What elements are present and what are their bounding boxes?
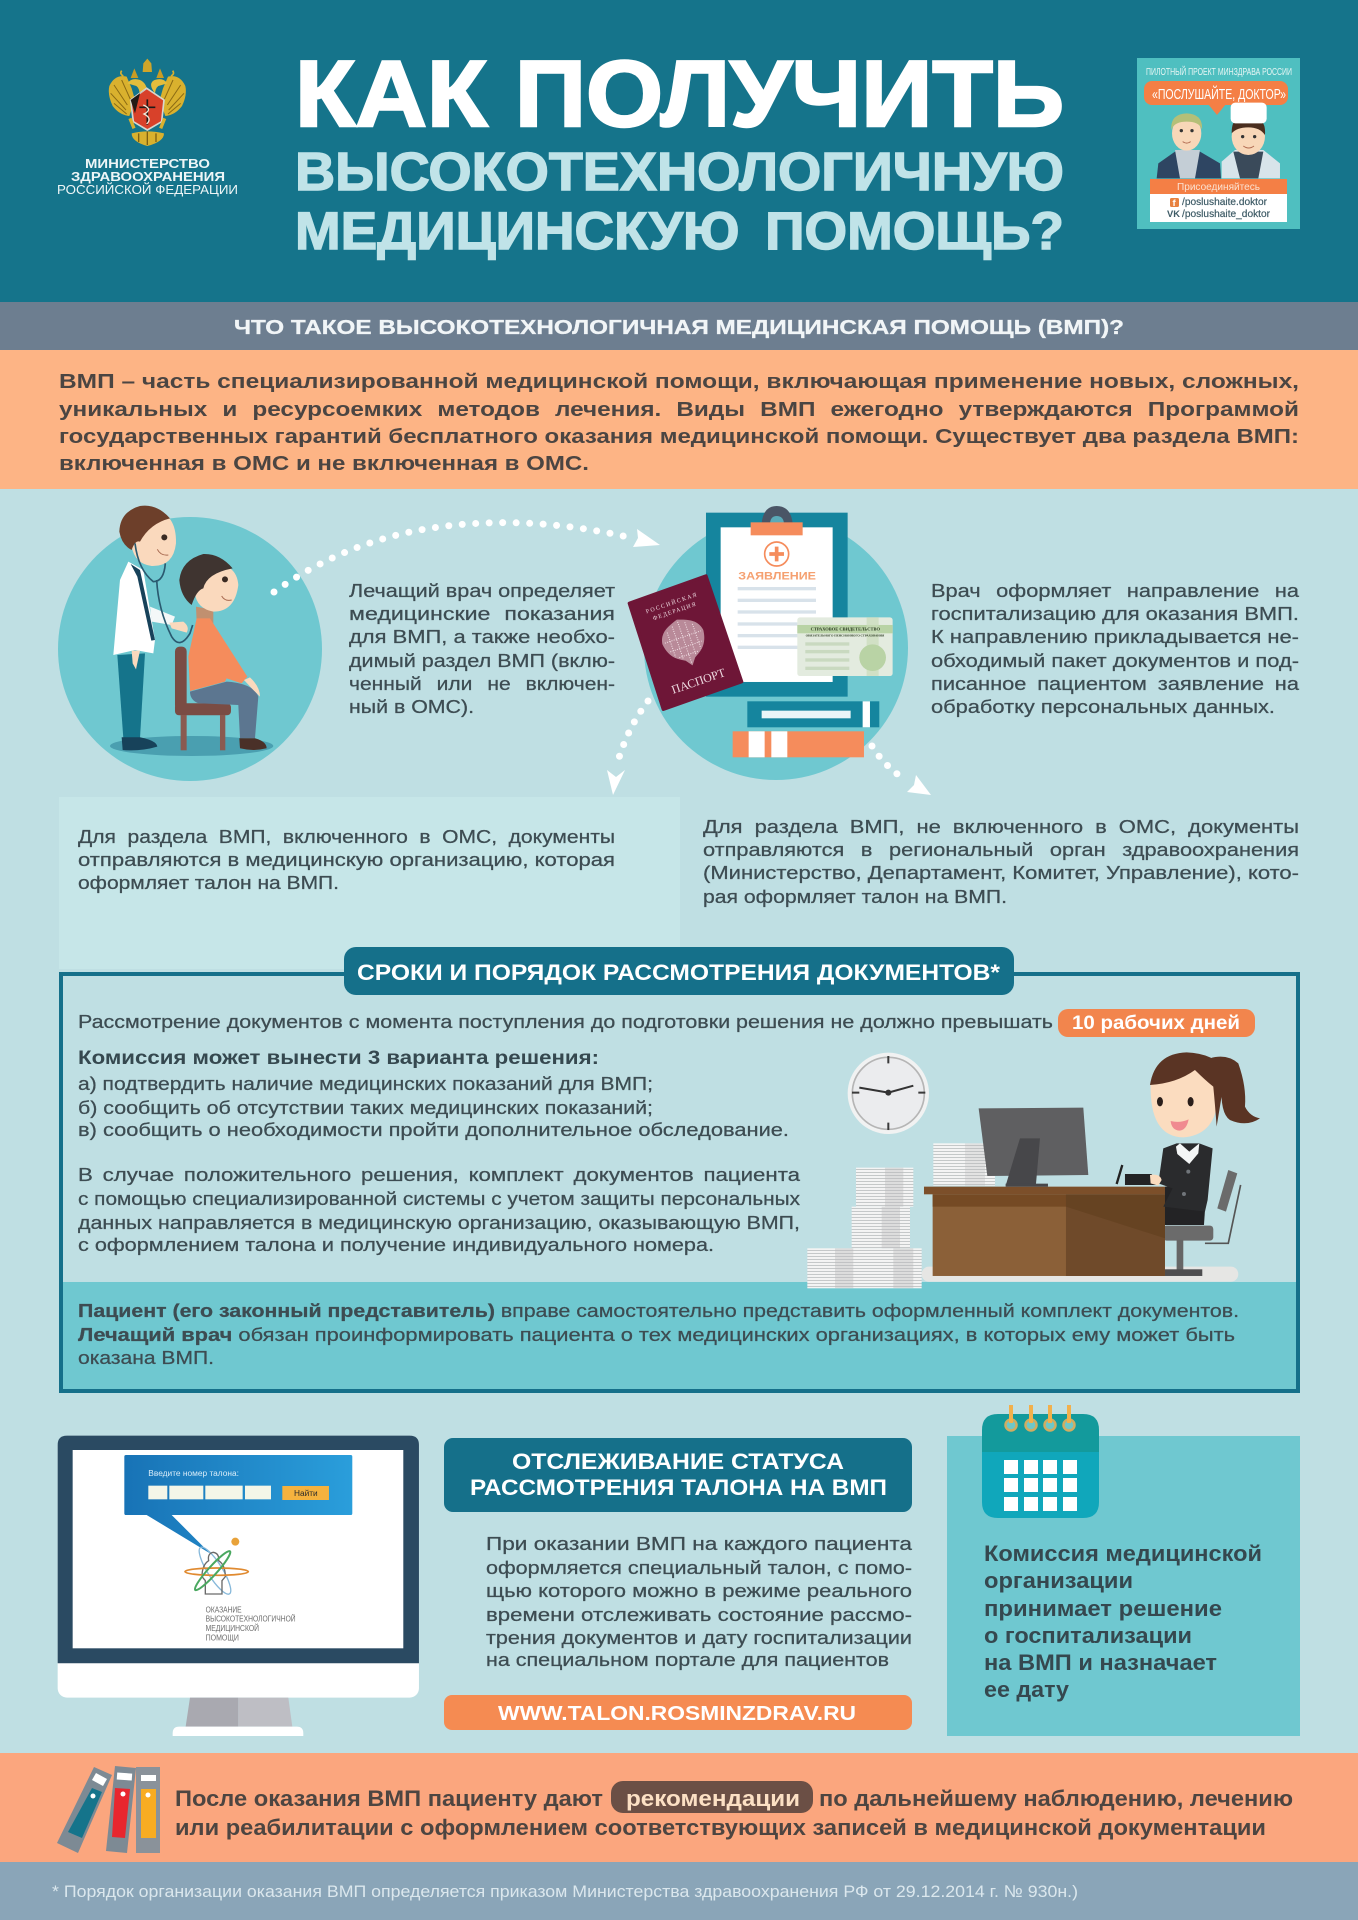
text: talon description: оформляется специальный талон, с помо- (486, 1557, 912, 1578)
band: recommendations (0, 1753, 1358, 1862)
text: ten working days limit (78, 1009, 1255, 1037)
poster: Послушайте, доктор: Присоединяйтесь (1177, 181, 1260, 193)
illustration: computer with talon portal: ВЫСОКОТЕХНОЛОГИЧНОЙ (206, 1615, 296, 1624)
text: attending doctor: димый раздел ВМП (вклю- (349, 650, 615, 671)
ministry name: ЗДРАВООХРАНЕНИЯ (71, 170, 225, 184)
poster: Послушайте, доктор (1137, 58, 1300, 229)
heading: review terms: СРОКИ И ПОРЯДОК РАССМОТРЕНИЯ ДОКУМЕНТОВ* (357, 960, 1000, 985)
heading: status tracking (444, 1438, 912, 1512)
text: commission decision (984, 1541, 1262, 1702)
text: talon description: на специальном портале для пациентов (486, 1649, 889, 1670)
ministry name: МИНИСТЕРСТВО (85, 157, 210, 171)
text: non-OMS branch (703, 816, 1299, 907)
panel: VMP definition: государственных гарантий бесплатного оказания медицинской помощи. Существует два раздела ВМП: (59, 425, 1299, 448)
text: talon description: трения документов и дату госпитализации (486, 1627, 912, 1648)
illustration: documents: ЗАЯВЛЕНИЕ (738, 570, 816, 582)
illustration: computer with talon portal: ОКАЗАНИЕ (206, 1605, 242, 1614)
illustration: computer with talon portal: МЕДИЦИНСКОЙ (206, 1624, 259, 1633)
poster: Послушайте, доктор: /poslushaite_doktor (1182, 208, 1270, 220)
text: attending doctor: ный в ОМС). (349, 696, 474, 717)
text: talon description (486, 1533, 913, 1670)
panel: review terms and procedure (61, 947, 1298, 1391)
text: recommendations (175, 1781, 1293, 1840)
illustration: documents: ОБЯЗАТЕЛЬНОГО ПЕНСИОННОГО СТРАХОВАНИЯ (806, 633, 885, 637)
title (295, 41, 1064, 261)
text: referral paperwork: писанное пациентом заявление на (931, 673, 1300, 694)
icon: ministry emblem (109, 59, 186, 146)
panel: VMP definition: включенная в ОМС и не включенная в ОМС. (59, 452, 589, 475)
text: commission decisions (78, 1048, 789, 1140)
text: referral paperwork: обходимый пакет документов и под- (931, 650, 1299, 671)
header band (0, 0, 1358, 302)
text: recommendations: рекомендации (626, 1786, 800, 1811)
panel: commission decides (947, 1405, 1300, 1736)
text: commission decision: ее дату (984, 1677, 1070, 1702)
poster: Послушайте, доктор: «ПОСЛУШАЙТЕ, ДОКТОР» (1152, 85, 1286, 103)
icon: portal logo (185, 1538, 248, 1598)
title: ВЫСОКОТЕХНОЛОГИЧНУЮ (295, 142, 1064, 202)
text: recommendations: или реабилитации с оформлением соответствующих записей в медицинской документации (175, 1815, 1266, 1840)
panel: VMP definition (0, 350, 1358, 489)
illustration: documents: ФЕДЕРАЦИЯ (652, 602, 697, 622)
illustration: clerk at desk (807, 1052, 1260, 1288)
text: commission decision: Комиссия медицинской (984, 1541, 1262, 1566)
ministry name (57, 157, 238, 197)
title: МЕДИЦИНСКУЮ ПОМОЩЬ? (295, 202, 1064, 261)
band: what is VMP: ЧТО ТАКОЕ ВЫСОКОТЕХНОЛОГИЧНАЯ МЕДИЦИНСКАЯ ПОМОЩЬ (ВМП)? (234, 317, 1124, 339)
text: referral paperwork: Врач оформляет направление на (931, 580, 1300, 601)
text: talon description: щью которого можно в режиме реального (486, 1580, 912, 1601)
text: recommendations: После оказания ВМП пациенту дают (175, 1786, 603, 1811)
text: talon description: При оказании ВМП на каждого пациента (486, 1533, 913, 1554)
text: non-OMS branch: Для раздела ВМП, не включенного в ОМС, документы (703, 816, 1299, 837)
text: positive decision: В случае положительного решения, комплект документов пациента (78, 1164, 801, 1185)
icon: calendar (982, 1405, 1099, 1518)
text: commission decision: организации (984, 1568, 1133, 1593)
button: portal url (444, 1695, 912, 1730)
panel: OMS branch: отправляются в медицинскую организацию, которая (78, 849, 615, 870)
text: positive decision: данных направляется в медицинскую организацию, оказывающую ВМП, (78, 1212, 800, 1233)
heading: status tracking: РАССМОТРЕНИЯ ТАЛОНА НА ВМП (470, 1475, 887, 1500)
text: attending doctor: для ВМП, а также необхо- (349, 626, 615, 647)
illustration: computer with talon portal: Найти (294, 1489, 318, 1498)
text: patient and doctor rights: Лечащий врач обязан проинформировать пациента о тех медицинских организациях, в которых ему может быть (78, 1324, 1235, 1345)
poster: Послушайте, доктор: ПИЛОТНЫЙ ПРОЕКТ МИНЗДРАВА РОССИИ (1146, 65, 1292, 78)
text: talon description: времени отслеживать состояние рассмо- (486, 1604, 912, 1625)
illustration: doctor examines patient (58, 506, 322, 781)
text: referral paperwork: госпитализацию для оказания ВМП. (931, 603, 1299, 624)
panel: VMP definition: ВМП – часть специализированной медицинской помощи, включающая применение новых, сложных, (59, 370, 1299, 393)
text: patient and doctor rights (78, 1300, 1239, 1368)
arrow: dotted from doctor to documents (274, 523, 660, 592)
panel: OMS branch (59, 797, 680, 969)
text: referral paperwork: К направлению прикладывается не- (931, 626, 1299, 647)
text: referral paperwork (931, 580, 1300, 717)
icon: binders (57, 1766, 160, 1853)
footer: footnote: * Порядок организации оказания ВМП определяется приказом Министерства здравоохранения РФ от 29.12.2014 г. № 930н.) (52, 1882, 1078, 1901)
text: commission decision: на ВМП и назначает (984, 1650, 1217, 1675)
text: commission decisions: Комиссия может вынести 3 варианта решения: (78, 1048, 599, 1069)
text: patient and doctor rights: Пациент (его законный представитель) вправе самостоятельно представить оформленный комплект документов. (78, 1300, 1239, 1321)
text: attending doctor: ченный или не включен- (349, 673, 615, 694)
text: positive decision: с помощью специализированной системы с учетом защиты персональных (78, 1188, 801, 1209)
text: positive decision (78, 1164, 801, 1255)
text: attending doctor: медицинские показания (349, 603, 615, 624)
text: positive decision: с оформлением талона и получение индивидуального номера. (78, 1234, 714, 1255)
text: commission decisions: в) сообщить о необходимости пройти дополнительное обследование. (78, 1119, 789, 1140)
illustration: documents (629, 506, 908, 780)
ministry name: РОССИЙСКОЙ ФЕДЕРАЦИИ (57, 182, 238, 197)
text: ten working days limit: 10 рабочих дней (1072, 1013, 1240, 1034)
text: commission decision: о госпитализации (984, 1623, 1192, 1648)
text: commission decisions: а) подтвердить наличие медицинских показаний для ВМП; (78, 1073, 653, 1094)
text: non-OMS branch: рая оформляет талон на ВМП. (703, 886, 1007, 907)
footer: footnote (0, 1862, 1358, 1920)
arrow: dotted to OMS branch (607, 701, 648, 795)
text: non-OMS branch: (Министерство, Департамент, Комитет, Управление), кото- (703, 862, 1299, 883)
text: attending doctor (349, 580, 616, 717)
heading: review terms (344, 947, 1014, 995)
button: portal url: WWW.TALON.ROSMINZDRAV.RU (498, 1703, 856, 1725)
band: what is VMP (0, 302, 1358, 350)
illustration: documents: РОССИЙСКАЯ (645, 591, 698, 615)
panel: VMP definition: уникальных и ресурсоемких методов лечения. Виды ВМП ежегодно утверждаются Программой (59, 398, 1299, 421)
text: non-OMS branch: отправляются в региональный орган здравоохранения (703, 839, 1299, 860)
poster: Послушайте, доктор: f (1172, 198, 1176, 209)
illustration: computer with talon portal (58, 1436, 419, 1736)
title: КАК ПОЛУЧИТЬ (295, 41, 1064, 146)
illustration: computer with talon portal: ПОМОЩИ (206, 1634, 239, 1643)
heading: status tracking: ОТСЛЕЖИВАНИЕ СТАТУСА (512, 1449, 844, 1474)
text: commission decisions: б) сообщить об отсутствии таких медицинских показаний; (78, 1097, 653, 1118)
text: recommendations: по дальнейшему наблюдению, лечению (819, 1786, 1293, 1811)
text: patient and doctor rights: оказана ВМП. (78, 1347, 214, 1368)
text: ten working days limit: Рассмотрение документов с момента поступления до подготовки решения не должно превышать (78, 1011, 1053, 1032)
illustration: computer with talon portal: Введите номер талона: (148, 1469, 239, 1478)
panel: OMS branch: Для раздела ВМП, включенного в ОМС, документы (78, 826, 615, 847)
text: commission decision: принимает решение (984, 1596, 1222, 1621)
poster: Послушайте, доктор: VK (1167, 209, 1181, 219)
arrow: dotted to non-OMS branch (872, 746, 931, 795)
text: referral paperwork: обработку персональных данных. (931, 696, 1275, 717)
text: attending doctor: Лечащий врач определяет (349, 580, 616, 601)
illustration: documents: ПАСПОРТ (670, 665, 728, 697)
panel: OMS branch: оформляет талон на ВМП. (78, 872, 339, 893)
poster: Послушайте, доктор: /poslushaite.doktor (1182, 196, 1267, 208)
illustration: documents: СТРАХОВОЕ СВИДЕТЕЛЬСТВО (811, 626, 881, 631)
